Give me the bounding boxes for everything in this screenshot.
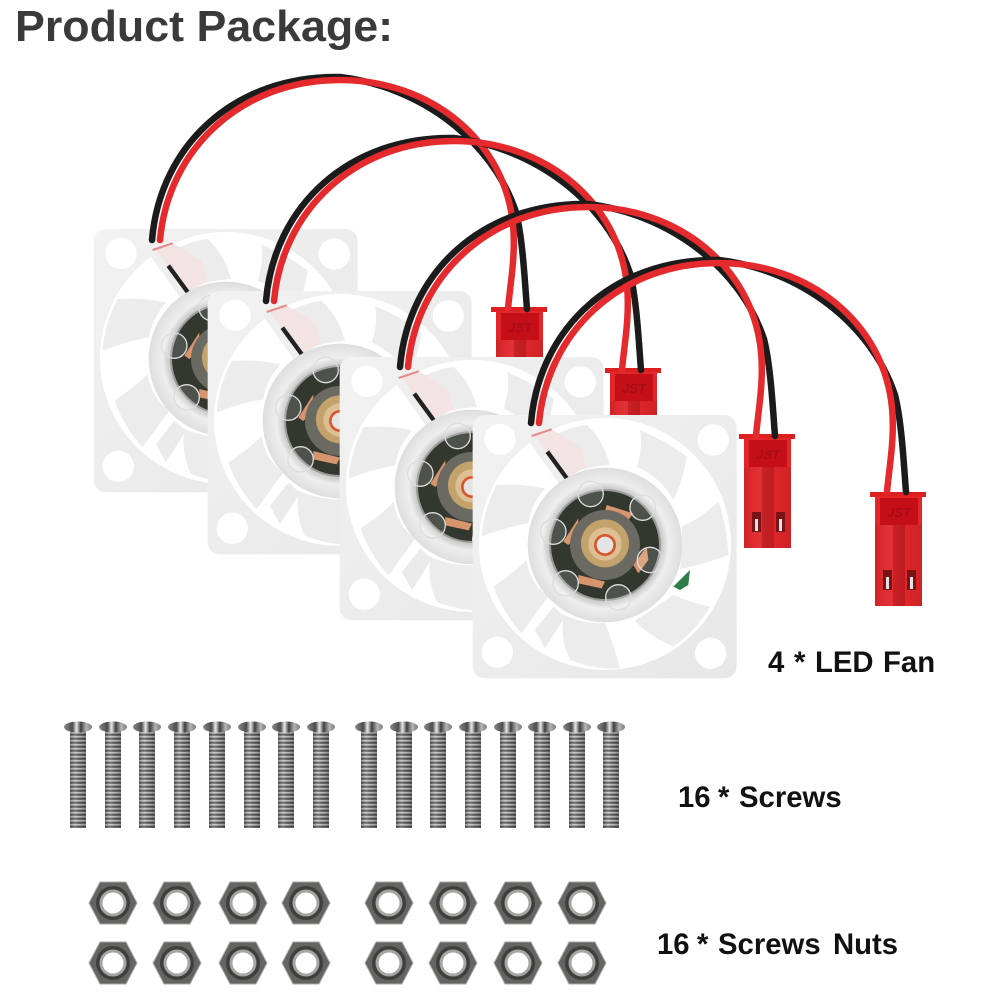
fan 2 with cable and connector [208,138,661,554]
fan 4 front with cable and connector [473,260,926,678]
label: screws: 16 [678,781,711,814]
title: Product Package: [15,2,393,51]
label: screws: * [718,781,730,814]
fan 1 with cable and connector [94,77,547,492]
label: screw nuts: Nuts [833,928,898,961]
label: screw nuts: 16 [657,928,690,961]
label: LED fan: Fan [883,646,935,679]
screws [64,722,625,828]
label: screw nuts: Screws [718,928,821,961]
nuts [89,882,606,984]
label: LED fan: 4 [768,646,785,679]
fan 3 with cable and connector [340,204,795,620]
label: LED fan: * [794,646,806,679]
label: screw nuts: * [697,928,709,961]
label: screws: Screws [739,781,842,814]
label: LED fan: LED [815,646,874,679]
